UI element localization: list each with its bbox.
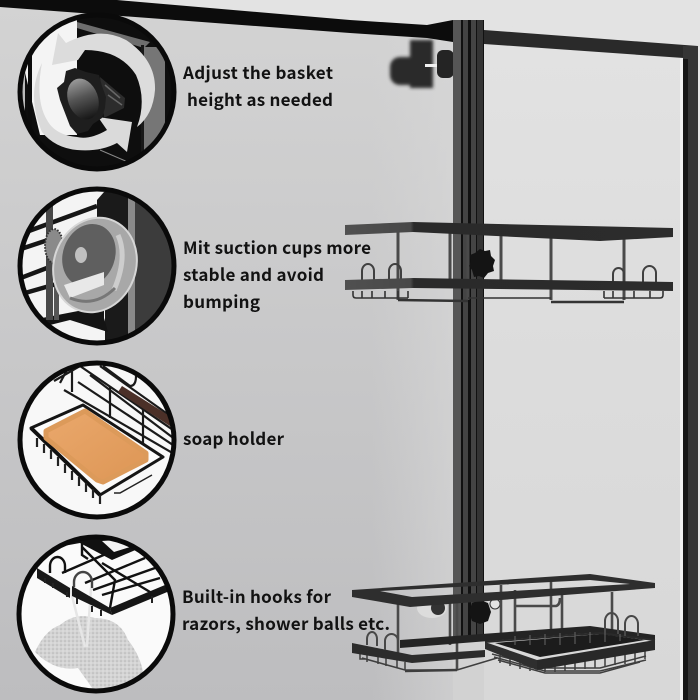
soap bar [46,411,146,482]
loofah [35,616,143,692]
hooks [367,613,638,650]
loofah cord [70,588,91,647]
wire shelf [50,543,160,608]
caption: built-in hooks [182,583,390,635]
upright wires [398,582,612,670]
caption: suction cups: bumping [183,288,260,313]
cup knurled nut [45,229,63,263]
top shelf [345,222,673,302]
caption: built-in hooks: Built-in hooks for [182,583,332,608]
curved arrow: lower [34,63,132,152]
lower basket wires [360,650,646,673]
hollow upper rail [352,574,655,607]
star knob [100,77,125,118]
caption: built-in hooks: razors, shower balls etc. [182,610,390,635]
back rail of lower basket [400,626,655,648]
detail circle: soap holder [18,361,176,519]
detail circle: suction cup [18,187,176,345]
detail circle: built-in hooks and loofah [18,535,176,693]
caption: suction cups [183,234,371,313]
left tray rail [352,643,485,663]
caption: suction cups: stable and avoid [183,261,324,286]
back basket wires [54,366,176,455]
blurred bracket behind glass [390,40,433,88]
door clamp pad [425,50,454,78]
caption: adjust height [182,59,333,111]
aluminium column [453,20,484,640]
upright wires [398,232,624,300]
wire basket under shelf [353,291,663,302]
suction cup disc [52,216,138,314]
detail circle: height adjustment knob [18,13,176,171]
caption: soap holder: soap holder [183,425,285,450]
caption: suction cups: Mit suction cups more [183,234,371,259]
suction cups and knob behind rail [417,598,500,624]
caption: adjust height: Adjust the basket [182,59,333,84]
soap tray [485,632,655,670]
caption: adjust height: height as needed [187,86,333,111]
bottom shelf [352,574,655,673]
lower shelf rail [345,278,673,291]
hanging hooks [362,264,656,282]
curved arrow: upper [52,33,155,127]
wire tray [31,405,163,495]
upper shelf plate [345,222,673,241]
adjustment knob [469,249,495,278]
